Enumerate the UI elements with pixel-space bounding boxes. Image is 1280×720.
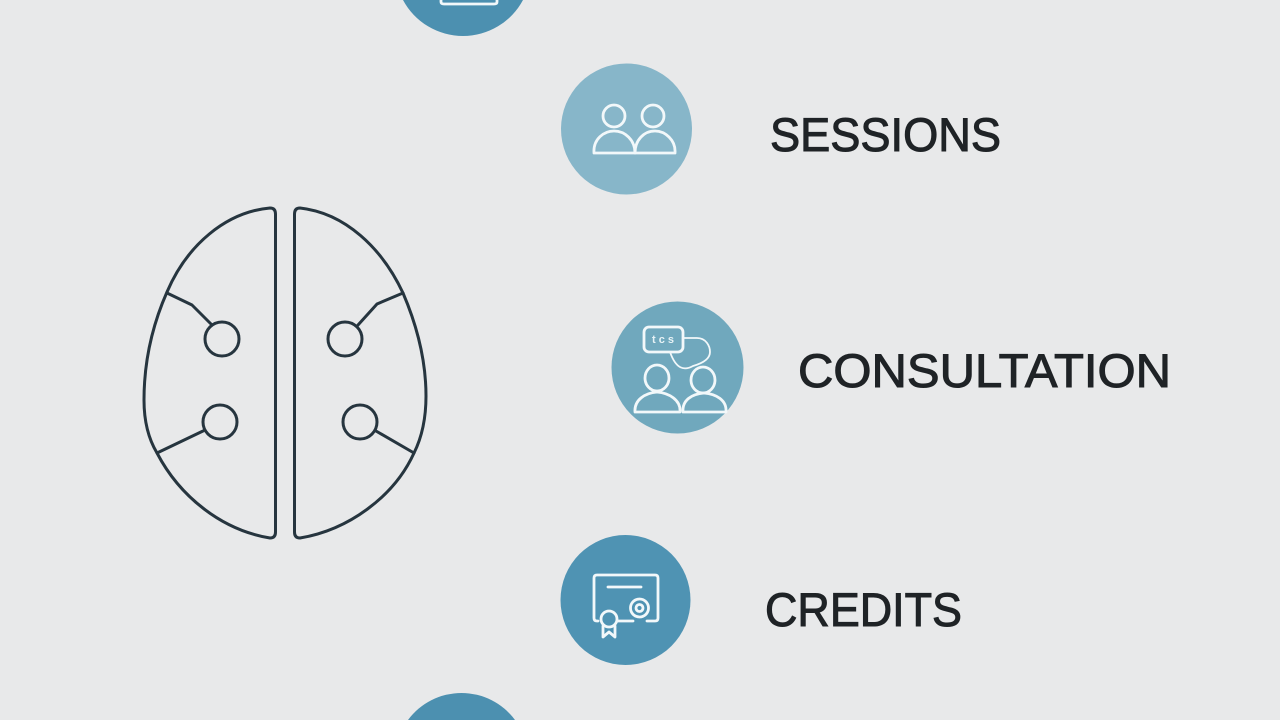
label: consultation: CONSULTATION	[798, 344, 1171, 397]
right lower node	[343, 405, 414, 453]
label: sessions: SESSIONS	[770, 108, 1001, 161]
left lower node	[157, 405, 237, 453]
left upper node	[167, 293, 239, 356]
right upper node	[328, 293, 403, 356]
brain right hemisphere	[294, 208, 426, 538]
brain left hemisphere	[144, 208, 276, 538]
icon: consultation, two people with speech bubble	[612, 302, 744, 434]
label: credits: CREDITS	[765, 583, 962, 636]
bubble text: tcs	[652, 334, 674, 346]
icon: top partial circle	[403, 0, 523, 36]
icon: brain outline with circuit nodes	[144, 208, 426, 538]
icon: sessions, two people	[561, 64, 692, 194]
icon: bottom partial circle	[408, 693, 515, 720]
icon: credits, certificate with ribbon	[560, 535, 690, 665]
